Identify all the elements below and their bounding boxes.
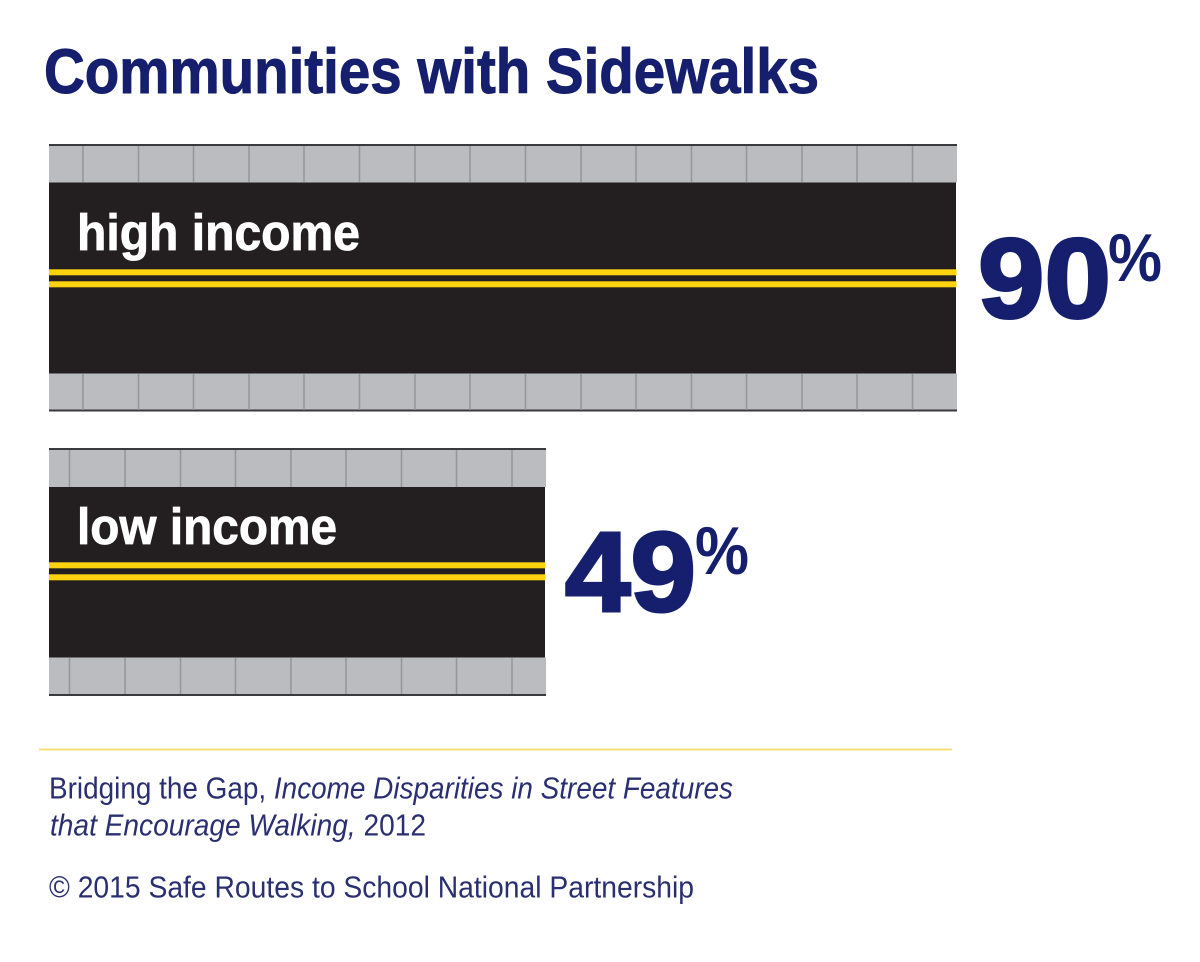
stat: 49 percent: 49 [565,509,696,635]
source citation: Bridging the Gap, Income Disparities in Street Features [49,770,733,806]
panel: high income road [49,144,957,412]
stat: 49 percent [565,509,749,635]
source citation [49,770,733,842]
stat: 49 percent: % [695,513,749,589]
road surface: high income [49,182,956,374]
source citation: that Encourage Walking, 2012 [50,808,426,842]
top sidewalk: low income [49,448,546,487]
divider rule [39,748,952,750]
label: high income: high income [77,204,360,261]
top sidewalk: high income [49,144,957,182]
stat: 90 percent: 90 [978,216,1111,342]
panel: low income road [49,448,546,696]
double yellow centre line: low income [49,562,546,580]
stat: 90 percent: % [1108,220,1162,296]
bottom sidewalk: low income [49,658,546,696]
bottom sidewalk: high income [49,374,957,412]
road surface: low income [49,487,545,658]
label: low income: low income [77,498,337,555]
title: Communities with Sidewalks [44,37,819,107]
copyright: © 2015 Safe Routes to School National Partnership [49,870,694,904]
stat: 90 percent [978,216,1162,342]
double yellow centre line: high income [49,269,956,287]
